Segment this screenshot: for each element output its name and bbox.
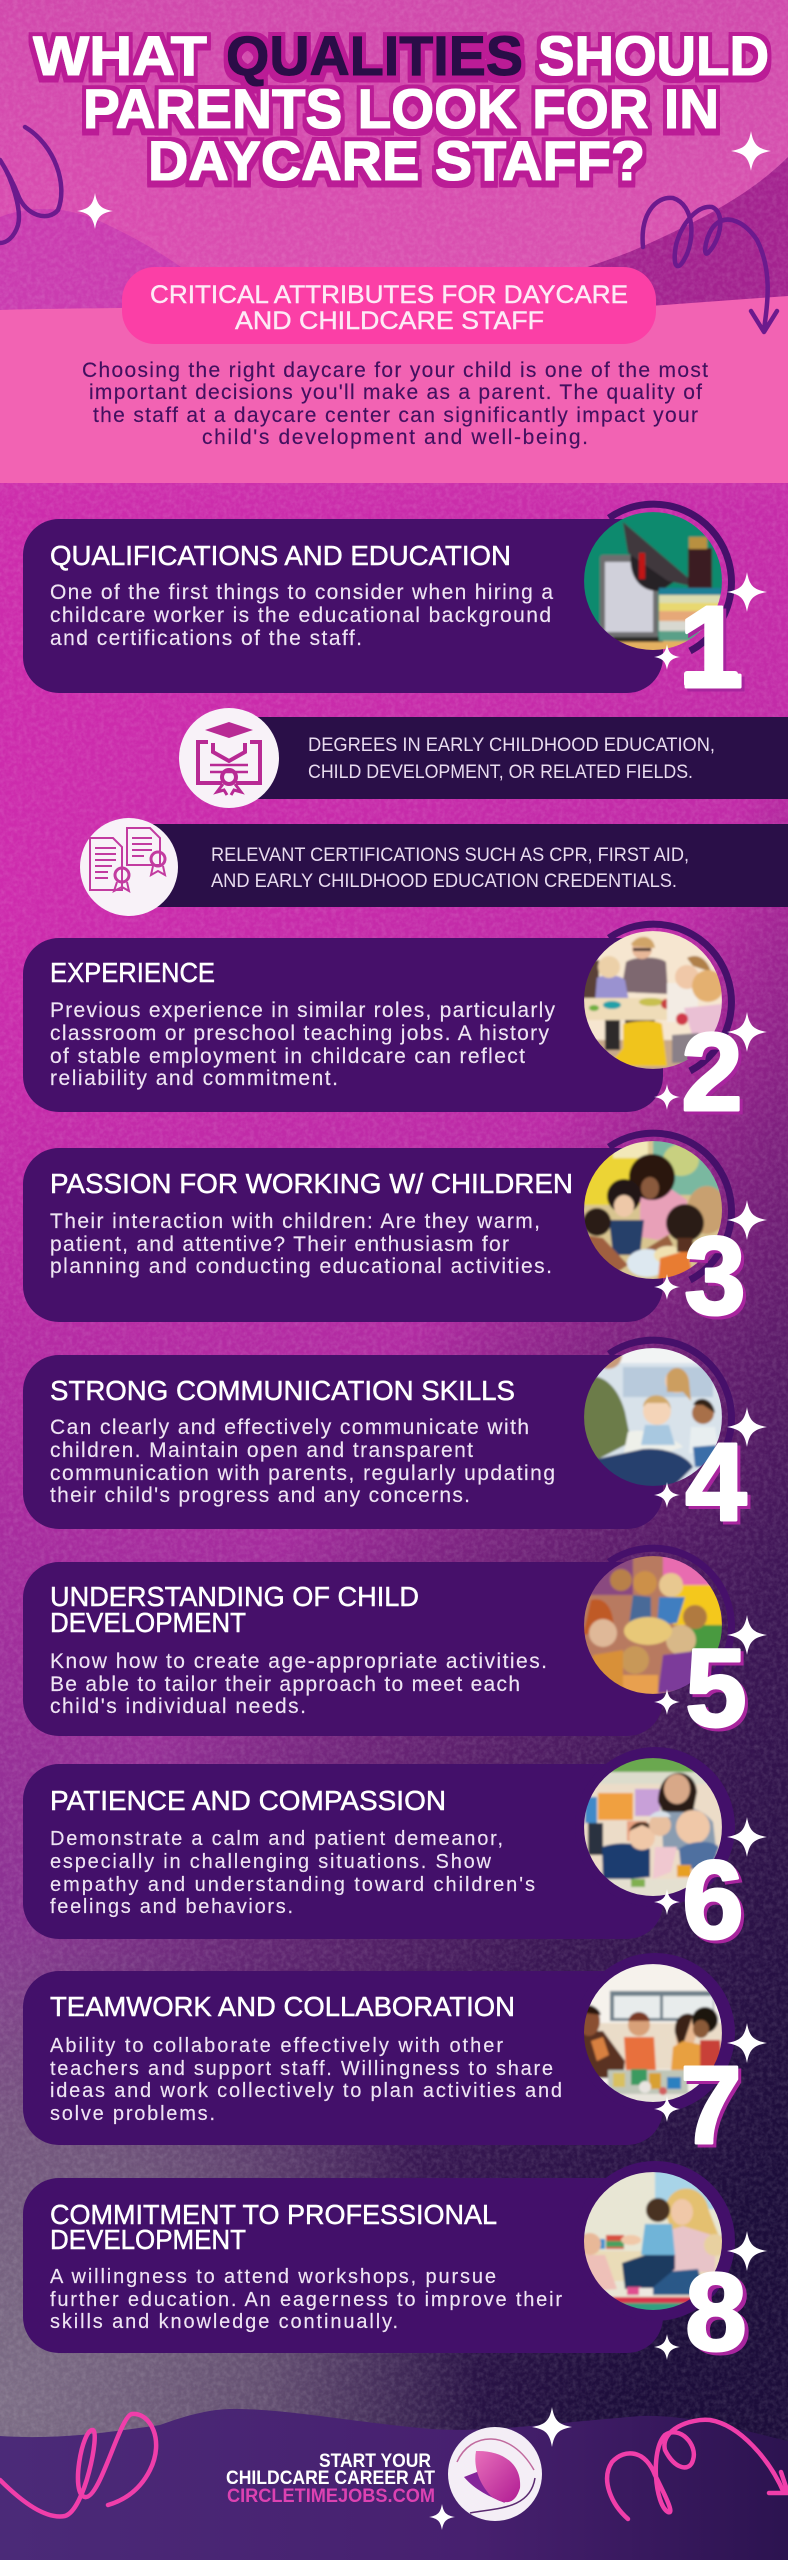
intro text: child's development and well-being. bbox=[202, 426, 588, 449]
number 1: 1 bbox=[682, 585, 746, 715]
body 3: planning and conducting educational activities. bbox=[50, 1255, 552, 1278]
body 8: further education. An eagerness to improve their bbox=[50, 2289, 562, 2311]
number 8: 8 bbox=[689, 2254, 751, 2377]
footer wave bbox=[0, 2409, 788, 2560]
number 7: 7 bbox=[680, 2044, 742, 2167]
sparkle footer top bbox=[532, 2407, 572, 2447]
sparkle top right bbox=[731, 131, 771, 171]
number 4: 4 bbox=[688, 1424, 750, 1547]
body 4: their child's progress and any concerns. bbox=[50, 1484, 470, 1507]
heading 3: PASSION FOR WORKING W/ CHILDREN bbox=[50, 1168, 573, 1199]
certifications text bbox=[211, 845, 689, 892]
body 4: Can clearly and effectively communicate with bbox=[50, 1416, 529, 1439]
sub-item: certifications bbox=[80, 818, 788, 916]
footer call to action: CHILDCARE CAREER AT bbox=[226, 2468, 435, 2489]
degrees text bbox=[308, 735, 715, 783]
certifications text: RELEVANT CERTIFICATIONS SUCH AS CPR, FIRST AID, bbox=[211, 845, 689, 866]
body 1: childcare worker is the educational background bbox=[50, 604, 551, 627]
sparkles 5 bbox=[654, 1615, 767, 1715]
sparkle footer bottom bbox=[429, 2504, 455, 2530]
title: SHOULD bbox=[538, 24, 769, 87]
body 3: patient, and attentive? Their enthusiasm for bbox=[50, 1233, 509, 1256]
body 5: child's individual needs. bbox=[50, 1695, 306, 1718]
body 7: solve problems. bbox=[50, 2103, 215, 2125]
ring 1 bbox=[609, 504, 731, 651]
photo 4: adult reading to children bbox=[583, 1341, 723, 1487]
heading 8 bbox=[50, 2199, 497, 2255]
body 2: classroom or preschool teaching jobs. A history bbox=[50, 1022, 550, 1045]
sparkles 1 bbox=[654, 572, 767, 670]
pink swirl left bbox=[0, 2414, 156, 2517]
title bbox=[33, 24, 769, 192]
heading 1: QUALIFICATIONS AND EDUCATION bbox=[50, 540, 511, 571]
subtitle pill bbox=[122, 267, 656, 344]
body 6 bbox=[50, 1828, 535, 1918]
panel 2: experience bbox=[23, 924, 767, 1137]
icon: graduation certificate bbox=[179, 708, 279, 808]
heading 4: STRONG COMMUNICATION SKILLS bbox=[50, 1375, 515, 1406]
intro text: important decisions you'll make as a parent. The quality of bbox=[89, 381, 702, 404]
heading 6: PATIENCE AND COMPASSION bbox=[50, 1785, 446, 1816]
number 1: 1 bbox=[679, 582, 743, 712]
title: PARENTS LOOK FOR IN bbox=[83, 77, 719, 140]
body 6: feelings and behaviors. bbox=[50, 1896, 293, 1918]
intro text: the staff at a daycare center can significantly impact your bbox=[93, 404, 698, 427]
number 3: 3 bbox=[687, 1218, 749, 1341]
sub-item: degrees bbox=[179, 708, 788, 808]
number 7: 7 bbox=[683, 2047, 745, 2170]
degrees text: CHILD DEVELOPMENT, OR RELATED FIELDS. bbox=[308, 762, 693, 783]
panel 7: teamwork and collaboration bbox=[23, 1953, 767, 2148]
body 2: of stable employment in childcare can reflect bbox=[50, 1045, 525, 1068]
decorative swirl with arrow right bbox=[643, 198, 777, 332]
body 1: One of the first things to consider when hiring a bbox=[50, 581, 553, 604]
panel 4: strong communication skills bbox=[23, 1340, 767, 1547]
intro text bbox=[82, 359, 708, 449]
panel 3: passion for working with children bbox=[23, 1133, 767, 1341]
photo 6: teacher with babies bbox=[583, 1757, 723, 1899]
number 3: 3 bbox=[684, 1215, 746, 1338]
photo 2: teacher and children at table bbox=[583, 930, 724, 1070]
footer call to action: CIRCLETIMEJOBS.COM bbox=[227, 2486, 435, 2507]
certifications text: AND EARLY CHILDHOOD EDUCATION CREDENTIALS. bbox=[211, 871, 677, 892]
body 5: Be able to tailor their approach to meet each bbox=[50, 1673, 520, 1696]
body 6: empathy and understanding toward children's bbox=[50, 1874, 535, 1896]
ring 3 bbox=[609, 1133, 731, 1280]
ring 2 bbox=[609, 924, 731, 1071]
body 3: Their interaction with children: Are they warm, bbox=[50, 1210, 540, 1233]
footer call to action bbox=[226, 2451, 435, 2507]
number 5: 5 bbox=[688, 1630, 750, 1753]
heading 5: UNDERSTANDING OF CHILD bbox=[50, 1581, 419, 1612]
footer call to action: START YOUR bbox=[319, 2451, 431, 2472]
body 4: communication with parents, regularly updating bbox=[50, 1462, 555, 1485]
body 3 bbox=[50, 1210, 552, 1278]
icon: certificates bbox=[80, 818, 178, 916]
body 6: Demonstrate a calm and patient demeanor, bbox=[50, 1828, 503, 1850]
body 2: reliability and commitment. bbox=[50, 1067, 338, 1090]
ring 8 bbox=[575, 2161, 735, 2321]
sparkles 4 bbox=[654, 1407, 767, 1508]
sparkles 3 bbox=[654, 1200, 767, 1300]
subtitle pill: CRITICAL ATTRIBUTES FOR DAYCARE bbox=[150, 281, 628, 309]
heading 8: DEVELOPMENT bbox=[50, 2224, 246, 2255]
number 2: 2 bbox=[684, 1014, 746, 1137]
number 5: 5 bbox=[685, 1627, 747, 1750]
logo bbox=[448, 2427, 542, 2521]
ring 6 bbox=[575, 1747, 735, 1907]
body 4 bbox=[50, 1416, 555, 1507]
photo 1: cap, tablet and books bbox=[583, 511, 723, 653]
body 5: Know how to create age-appropriate activities. bbox=[50, 1650, 547, 1673]
sparkle top left bbox=[77, 193, 113, 229]
body 7: ideas and work collectively to plan activities and bbox=[50, 2080, 562, 2102]
heading 8: COMMITMENT TO PROFESSIONAL bbox=[50, 2199, 497, 2230]
heading 5 bbox=[50, 1581, 419, 1638]
body 1: and certifications of the staff. bbox=[50, 627, 362, 650]
body 6: especially in challenging situations. Show bbox=[50, 1851, 492, 1873]
body 8: skills and knowledge continually. bbox=[50, 2311, 398, 2333]
heading 2: EXPERIENCE bbox=[50, 957, 215, 988]
pink swirl with arrow right bbox=[607, 2420, 788, 2519]
photo 8: teacher clapping with toddler bbox=[579, 2171, 726, 2313]
panel 5: understanding of child development bbox=[23, 1548, 767, 1753]
degrees text: DEGREES IN EARLY CHILDHOOD EDUCATION, bbox=[308, 735, 715, 756]
decorative swirl left bbox=[0, 127, 61, 243]
body 5 bbox=[50, 1650, 547, 1718]
heading 5: DEVELOPMENT bbox=[50, 1607, 246, 1638]
photo 7: teacher and kids at table bbox=[578, 1963, 723, 2105]
number 8: 8 bbox=[685, 2251, 747, 2374]
body 8 bbox=[50, 2266, 562, 2333]
body 4: children. Maintain open and transparent bbox=[50, 1439, 473, 1462]
body 8: A willingness to attend workshops, pursue bbox=[50, 2266, 496, 2288]
number 4: 4 bbox=[685, 1421, 747, 1544]
heading 7: TEAMWORK AND COLLABORATION bbox=[50, 1991, 515, 2022]
sparkles 8 bbox=[654, 2231, 767, 2360]
body 1 bbox=[50, 581, 553, 650]
photo 5: children in a circle on play mat bbox=[583, 1555, 723, 1695]
title: QUALITIES bbox=[226, 24, 523, 87]
body 7: Ability to collaborate effectively with other bbox=[50, 2035, 503, 2057]
panel 8: commitment to professional development bbox=[23, 2161, 767, 2377]
sparkles 2 bbox=[654, 1012, 767, 1110]
ring 5 bbox=[609, 1548, 731, 1695]
sparkles 7 bbox=[654, 2023, 767, 2122]
number 6: 6 bbox=[682, 1839, 744, 1962]
body 7 bbox=[50, 2035, 562, 2125]
title: DAYCARE STAFF? bbox=[148, 129, 645, 192]
body 2: Previous experience in similar roles, particularly bbox=[50, 999, 556, 1022]
ring 7 bbox=[575, 1953, 735, 2113]
title: WHAT bbox=[33, 24, 207, 87]
panel 6: patience and compassion bbox=[23, 1747, 767, 1965]
subtitle pill: AND CHILDCARE STAFF bbox=[235, 307, 544, 335]
panel 1: qualifications and education bbox=[23, 504, 767, 715]
ring 4 bbox=[609, 1340, 731, 1487]
number 6: 6 bbox=[685, 1842, 747, 1965]
body 2 bbox=[50, 999, 556, 1090]
sparkles 6 bbox=[654, 1817, 767, 1915]
number 2: 2 bbox=[681, 1011, 743, 1134]
intro text: Choosing the right daycare for your child is one of the most bbox=[82, 359, 708, 382]
photo 3: teacher reading with children bbox=[583, 1140, 727, 1280]
body 7: teachers and support staff. Willingness to share bbox=[50, 2058, 553, 2080]
